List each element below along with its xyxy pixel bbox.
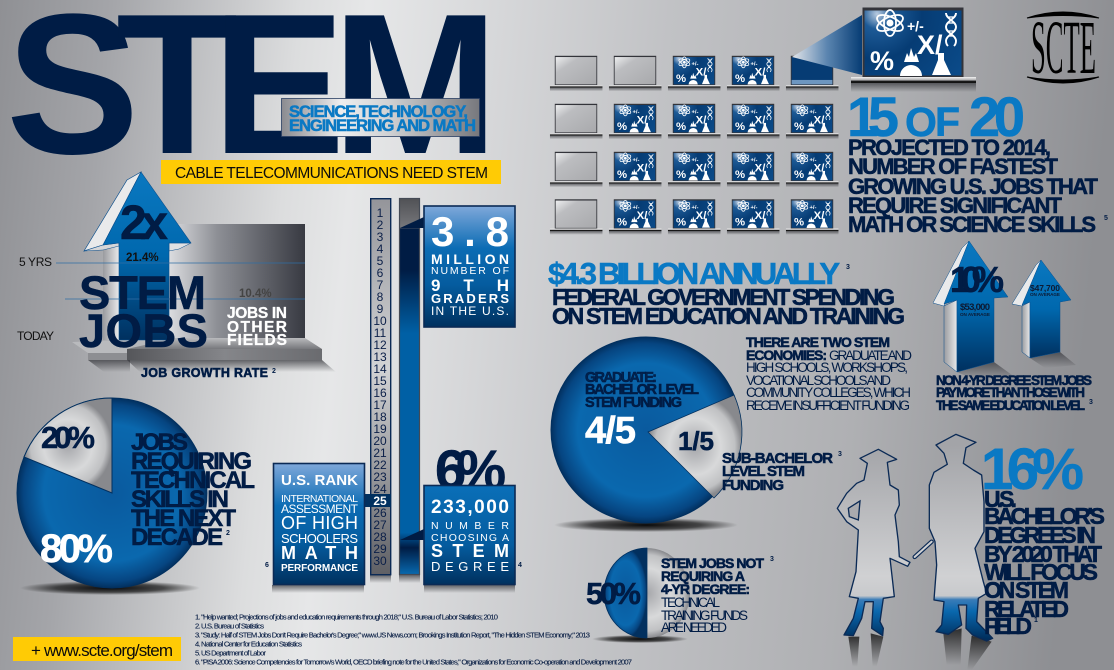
- text: STEM jobs not requiring a 4-yr degree: [661, 555, 774, 635]
- row 2 of laptops: %: [735, 121, 745, 133]
- text: degrees focus: BY 2020 THAT: [984, 541, 1102, 567]
- text: jobs requiring technical skills in the next decade: TECHNICAL: [131, 467, 255, 494]
- row 2 of laptops: X/: [637, 114, 648, 126]
- row 3 of laptops: X/: [637, 162, 648, 174]
- label: STEM jobs: JOBS: [79, 304, 208, 357]
- text: fastest growing jobs: GROWING U.S. JOBS THAT: [848, 174, 1099, 199]
- row 4 of laptops: +/-: [691, 205, 699, 211]
- column: rank scale 1 to 30: 25: [373, 494, 387, 508]
- stat: $4.3 billion annually: [548, 256, 905, 329]
- text: non 4-yr degree pay: NON 4-YR DEGREE STEM JOBS: [936, 373, 1092, 388]
- box: 3.8 million 9th graders: GRADERS: [431, 291, 509, 306]
- footnotes: 2. U.S. Bureau of Statistics: [195, 622, 264, 630]
- label: graduate funding: BACHELOR LEVEL: [585, 382, 699, 398]
- subtitle box: science, technology, engineering and math: SCIENCE,TECHNOLOGY,: [289, 103, 468, 121]
- column: rank scale 1 to 30: 28: [373, 530, 387, 544]
- row 1 of laptops: +/-: [691, 62, 699, 68]
- label: jobs in other fields: FIELDS: [227, 332, 287, 349]
- row 3 of laptops: X/: [755, 162, 766, 174]
- box: 3.8 million 9th graders: 9 T H: [431, 276, 509, 295]
- text: jobs requiring technical skills in the next decade: DECADE: [131, 524, 223, 551]
- label: sub-bachelor funding: [722, 450, 842, 494]
- column: rank scale 1 to 30: 27: [373, 518, 387, 532]
- icon: large laptop: [851, 8, 976, 92]
- row 1 of laptops: %: [676, 73, 686, 85]
- text: non 4-yr degree pay: PAY MORE THAN THOSE WITH: [936, 385, 1085, 400]
- box: U.S. rank: PERFORMANCE: [281, 563, 358, 574]
- text: degrees focus: [984, 486, 1105, 639]
- row 4 of laptops: X/: [755, 210, 766, 222]
- row 2 of laptops: +/-: [750, 110, 758, 116]
- row 4 of laptops: +/-: [809, 205, 817, 211]
- text: federal government spending: ON STEM EDUCATION AND TRAINING: [552, 303, 905, 329]
- stat: 16% bachelor's degrees: [981, 437, 1105, 639]
- column: rank scale 1 to 30: 16: [373, 386, 387, 400]
- row 3 of laptops: +/-: [809, 158, 817, 164]
- URL button: [13, 637, 181, 661]
- arrow: $47,700: $47,700: [1030, 283, 1060, 293]
- column: rank scale 1 to 30: 4: [377, 242, 384, 256]
- text: two STEM economies: RECEIVE INSUFFICIENT FUNDING: [746, 398, 910, 413]
- column: rank scale 1 to 30: 30: [373, 554, 387, 568]
- row 2 of laptops: %: [617, 121, 627, 133]
- panel: U.S. rank column: [265, 199, 391, 593]
- text: fastest growing jobs: 5: [1104, 215, 1108, 222]
- box: U.S. rank: OF HIGH: [281, 513, 358, 533]
- icon: large laptop: +/-: [907, 18, 924, 34]
- label: today: TODAY: [17, 329, 54, 343]
- banner: cable telecommunications need STEM: [161, 160, 501, 184]
- arrow: $53,000: [933, 241, 1008, 372]
- column: rank scale 1 to 30: 1: [377, 206, 384, 220]
- row 4 of laptops: [550, 199, 838, 235]
- text: two STEM economies: ECONOMIES:: [746, 347, 827, 363]
- row 3 of laptops: +/-: [632, 158, 640, 164]
- text: non 4-yr degree pay: THE SAME EDUCATION LEVEL: [936, 398, 1085, 413]
- row 3 of laptops: %: [676, 169, 686, 181]
- row 3 of laptops: %: [735, 169, 745, 181]
- URL button: + www.scte.org/stem: [31, 641, 173, 660]
- arrow: $47,700: ON AVERAGE: [1030, 292, 1060, 297]
- panel: laptop grid 15 of 20: [550, 8, 976, 235]
- box: 3.8 million 9th graders: NUMBER OF: [431, 265, 509, 277]
- text: STEM jobs not requiring a 4-yr degree: ARE NEEDED: [661, 620, 727, 635]
- stat: 16% bachelor's degrees: 16%: [981, 437, 1084, 502]
- text: STEM jobs not requiring a 4-yr degree: 3: [770, 556, 774, 563]
- column: rank scale 1 to 30: 14: [373, 362, 387, 376]
- pie chart: 50%: [586, 548, 774, 643]
- text: STEM jobs not requiring a 4-yr degree: REQUIRING A: [661, 568, 745, 584]
- footnotes: [195, 612, 632, 666]
- row 3 of laptops: +/-: [750, 158, 758, 164]
- stat: 15 of 20: 15: [847, 85, 899, 148]
- label: 10.4%: 10.4%: [239, 288, 272, 300]
- row 2 of laptops: X/: [755, 114, 766, 126]
- label: 1/5: 1/5: [678, 426, 714, 456]
- box: U.S. rank: INTERNATIONAL: [281, 493, 358, 505]
- text: STEM jobs not requiring a 4-yr degree: STEM JOBS NOT: [661, 555, 764, 571]
- column: rank scale 1 to 30: 13: [373, 350, 387, 364]
- row 4 of laptops: %: [794, 217, 804, 229]
- text: jobs requiring technical skills in the next decade: SKILLS IN: [131, 486, 229, 513]
- text: jobs requiring technical skills in the next decade: [131, 429, 255, 551]
- text: degrees focus: BACHELOR'S: [984, 503, 1105, 529]
- column: rank scale 1 to 30: 2: [377, 218, 384, 232]
- row 4 of laptops: %: [735, 217, 745, 229]
- label: STEM jobs: [79, 266, 208, 357]
- label: sub-bachelor funding: LEVEL STEM: [722, 463, 805, 480]
- text: non 4-yr degree pay: 3: [1089, 399, 1093, 406]
- text: STEM jobs not requiring a 4-yr degree: TRAINING FUNDS: [661, 608, 748, 623]
- row 2 of laptops: %: [676, 121, 686, 133]
- panel: pay comparison arrows: [933, 241, 1093, 413]
- text: jobs requiring technical skills in the next decade: 2: [226, 530, 230, 537]
- text: two STEM economies: COMMUNITY COLLEGES, WHICH: [746, 385, 911, 400]
- text: jobs requiring technical skills in the next decade: JOBS: [131, 429, 188, 456]
- label: jobs in other fields: JOBS IN: [227, 305, 287, 322]
- label: 80%: 80%: [40, 527, 113, 571]
- row 2 of laptops: +/-: [809, 110, 817, 116]
- footnote mark 4: 4: [518, 562, 522, 569]
- row 4 of laptops: X/: [637, 210, 648, 222]
- column: rank scale 1 to 30: 8: [377, 290, 384, 304]
- row 1 of laptops: +/-: [750, 62, 758, 68]
- text: degrees focus: 1: [1034, 617, 1038, 624]
- label: 5 yrs: 5 YRS: [19, 255, 52, 269]
- icon: large laptop: X/: [917, 30, 943, 60]
- footnotes: 1. "Help wanted; Projections of jobs and education requirements through 2018;" U.S. Bureau of Labor Statistics; 2010: [195, 612, 498, 622]
- column: rank scale 1 to 30: 20: [373, 434, 387, 448]
- row 4 of laptops: X/: [814, 210, 825, 222]
- stat: 15 of 20: [847, 85, 1108, 237]
- label: 21.4%: 21.4%: [126, 252, 159, 264]
- chart: job growth rate: [17, 172, 336, 380]
- row 4 of laptops: +/-: [750, 205, 758, 211]
- row 3 of laptops: [550, 152, 838, 187]
- row 3 of laptops: %: [794, 169, 804, 181]
- stat: 15 of 20: 20: [969, 85, 1025, 148]
- arrow: $47,700: [1012, 260, 1071, 358]
- column: funnel bar: [400, 198, 424, 574]
- text: jobs requiring technical skills in the next decade: THE NEXT: [131, 505, 236, 532]
- column: rank scale 1 to 30: 11: [374, 326, 387, 340]
- pie chart: 4/5 and 1/5 funding: [551, 337, 842, 532]
- box: U.S. rank: ASSESSMENT: [281, 502, 359, 516]
- text: degrees focus: RELATED: [984, 596, 1069, 622]
- row 3 of laptops: X/: [696, 162, 707, 174]
- text: STEM jobs not requiring a 4-yr degree: 4-YR DEGREE:: [661, 581, 750, 597]
- row 4 of laptops: +/-: [632, 205, 640, 211]
- column: rank scale 1 to 30: 23: [373, 470, 387, 484]
- text: fastest growing jobs: PROJECTED TO 2014,: [848, 135, 1051, 160]
- stat: $4.3 billion annually: 3: [846, 264, 850, 271]
- box: 233,000 choosing a STEM degree: NUMBER: [431, 520, 509, 532]
- footnotes: 4. National Center for Education Statistics: [195, 640, 302, 648]
- row 3 of laptops: +/-: [691, 158, 699, 164]
- column: rank scale 1 to 30: 15: [373, 374, 387, 388]
- icon: large laptop: %: [870, 46, 894, 76]
- box: U.S. rank: MATH: [281, 543, 358, 563]
- footnote mark 6: 6: [265, 562, 269, 569]
- arrow: $53,000: ON AVERAGE: [960, 312, 990, 317]
- box: 3.8 million 9th graders: [424, 206, 515, 327]
- text: degrees focus: WILL FOCUS: [984, 559, 1098, 585]
- row 4 of laptops: %: [617, 217, 627, 229]
- column: rank scale 1 to 30: 22: [373, 458, 387, 472]
- column: rank scale 1 to 30: 18: [373, 410, 387, 424]
- text: two STEM economies: GRADUATE AND: [829, 348, 912, 363]
- subtitle box: science, technology, engineering and math: [282, 98, 480, 136]
- row 4 of laptops: %: [676, 217, 686, 229]
- box: U.S. rank: U.S. RANK: [281, 472, 358, 489]
- text: degrees focus: U.S.: [984, 486, 1017, 512]
- text: STEM jobs not requiring a 4-yr degree: TECHNICAL: [661, 595, 720, 610]
- box: 3.8 million 9th graders: MILLION: [431, 251, 509, 267]
- box: 233,000 choosing a STEM degree: [424, 486, 515, 584]
- text: federal government spending: [552, 284, 905, 329]
- column: rank scale 1 to 30: 12: [373, 338, 387, 352]
- arrow: $53,000: $53,000: [960, 302, 990, 313]
- text: two STEM economies: VOCATIONAL SCHOOLS AND: [746, 373, 891, 388]
- illustration: graduates: [837, 434, 993, 670]
- banner: cable telecommunications need STEM: CABLE TELECOMMUNICATIONS NEED STEM: [175, 165, 488, 182]
- row 2 of laptops: [550, 104, 838, 139]
- label: sub-bachelor funding: FUNDING: [722, 477, 784, 494]
- label: graduate funding: [585, 370, 699, 411]
- label: 4/5: 4/5: [585, 410, 636, 452]
- figure: 6%: 6%: [435, 438, 506, 501]
- row 1 of laptops: X/: [696, 66, 707, 78]
- box: 3.8 million 9th graders: IN THE U.S.: [431, 304, 509, 318]
- row 1 of laptops: X/: [755, 66, 766, 78]
- column: rank scale 1 to 30: 26: [373, 506, 387, 520]
- text: federal government spending: FEDERAL GOVERNMENT SPENDING: [552, 284, 895, 310]
- box: U.S. rank: SCHOOLERS: [281, 531, 358, 546]
- footnotes: 6. "PISA 2006: Science Competencies for Tomorrow's World, OECD briefing note for the United States," Organizations for Economic Co-operation and Development 2007: [195, 658, 632, 666]
- row 3 of laptops: %: [617, 169, 627, 181]
- column: rank scale 1 to 30: [364, 199, 391, 575]
- column: rank scale 1 to 30: 19: [373, 422, 387, 436]
- label: 50%: 50%: [586, 576, 641, 611]
- footnotes: 5. US Department of Labor: [195, 648, 266, 658]
- stat: $4.3 billion annually: $4.3 BILLION ANNUALLY: [548, 256, 840, 291]
- text: two STEM economies: [746, 334, 912, 413]
- text: jobs requiring technical skills in the next decade: REQUIRING: [131, 448, 252, 475]
- label: 20%: 20%: [41, 420, 95, 455]
- label: sub-bachelor funding: 3: [838, 451, 842, 458]
- column: rank scale 1 to 30: 10: [373, 314, 387, 328]
- text: fastest growing jobs: REQUIRE SIGNIFICANT: [848, 193, 1063, 218]
- text: non 4-yr degree pay: [936, 373, 1093, 413]
- figure: woman: [837, 449, 910, 636]
- stat: 15 of 20: OF: [905, 99, 960, 145]
- box: 3.8 million 9th graders: 3 . 8: [431, 208, 509, 255]
- label: jobs in other fields: OTHER: [227, 319, 287, 336]
- column: rank scale 1 to 30: 24: [373, 482, 387, 496]
- column: rank scale 1 to 30: 29: [373, 542, 387, 556]
- label: graduate funding: STEM FUNDING: [585, 395, 682, 411]
- label: sub-bachelor funding: SUB-BACHELOR: [722, 450, 833, 467]
- row 2 of laptops: %: [794, 121, 804, 133]
- text: fastest growing jobs: [848, 135, 1108, 237]
- column: rank scale 1 to 30: 17: [373, 398, 387, 412]
- row 2 of laptops: X/: [696, 114, 707, 126]
- column: rank scale 1 to 30: 9: [377, 302, 384, 316]
- text: degrees focus: DEGREES IN: [984, 522, 1096, 548]
- text: fastest growing jobs: MATH OR SCIENCE SKILLS: [848, 212, 1096, 237]
- figure: man: [915, 434, 993, 641]
- arrow: $53,000: 10%: [950, 259, 1004, 300]
- pie chart: 80% jobs requiring technical skills: [17, 398, 255, 595]
- panel: 9th graders to STEM degree column: [399, 198, 522, 593]
- row 4 of laptops: X/: [696, 210, 707, 222]
- row 2 of laptops: +/-: [632, 110, 640, 116]
- box: 233,000 choosing a STEM degree: STEM: [431, 541, 509, 561]
- box: 233,000 choosing a STEM degree: DEGREE: [431, 559, 509, 574]
- row 1 of laptops: [550, 56, 838, 91]
- subtitle box: science, technology, engineering and math: ENGINEERING AND MATH: [289, 117, 476, 135]
- row 2 of laptops: +/-: [691, 110, 699, 116]
- row 1 of laptops: %: [735, 73, 745, 85]
- column: rank scale 1 to 30: 7: [377, 278, 384, 292]
- text: fastest growing jobs: NUMBER OF FASTEST: [848, 154, 1059, 179]
- row 2 of laptops: X/: [814, 114, 825, 126]
- label: STEM jobs: STEM: [79, 266, 206, 319]
- text: degrees focus: ON STEM: [984, 577, 1069, 603]
- footnotes: 3. "Study: Half of STEM Jobs Don't Require Bachelor's Degree;" www.US News.com; Brookings Institution Report, "The Hidden STEM Economy;" 2013: [195, 630, 590, 640]
- text: two STEM economies: THERE ARE TWO STEM: [746, 334, 890, 350]
- row 3 of laptops: X/: [814, 162, 825, 174]
- box: U.S. rank: [274, 464, 364, 584]
- text: degrees focus: FIELD: [984, 613, 1032, 639]
- box: 233,000 choosing a STEM degree: CHOOSING A: [431, 532, 509, 544]
- label: graduate funding: GRADUATE:: [585, 370, 657, 386]
- chart caption: JOB GROWTH RATE: [141, 366, 268, 380]
- label: jobs in other fields: [227, 305, 287, 349]
- box: 233,000 choosing a STEM degree: 233,000: [431, 497, 509, 518]
- column: rank scale 1 to 30: 5: [377, 254, 384, 268]
- chart caption: 2: [272, 368, 276, 375]
- label: 2x: 2x: [120, 197, 168, 250]
- text: two STEM economies: HIGH SCHOOLS, WORKSHOPS,: [746, 360, 908, 375]
- zoom beam: [792, 15, 862, 75]
- column: rank scale 1 to 30: 6: [377, 266, 384, 280]
- column: rank scale 1 to 30: 21: [373, 446, 387, 460]
- column: rank scale 1 to 30: 3: [377, 230, 384, 244]
